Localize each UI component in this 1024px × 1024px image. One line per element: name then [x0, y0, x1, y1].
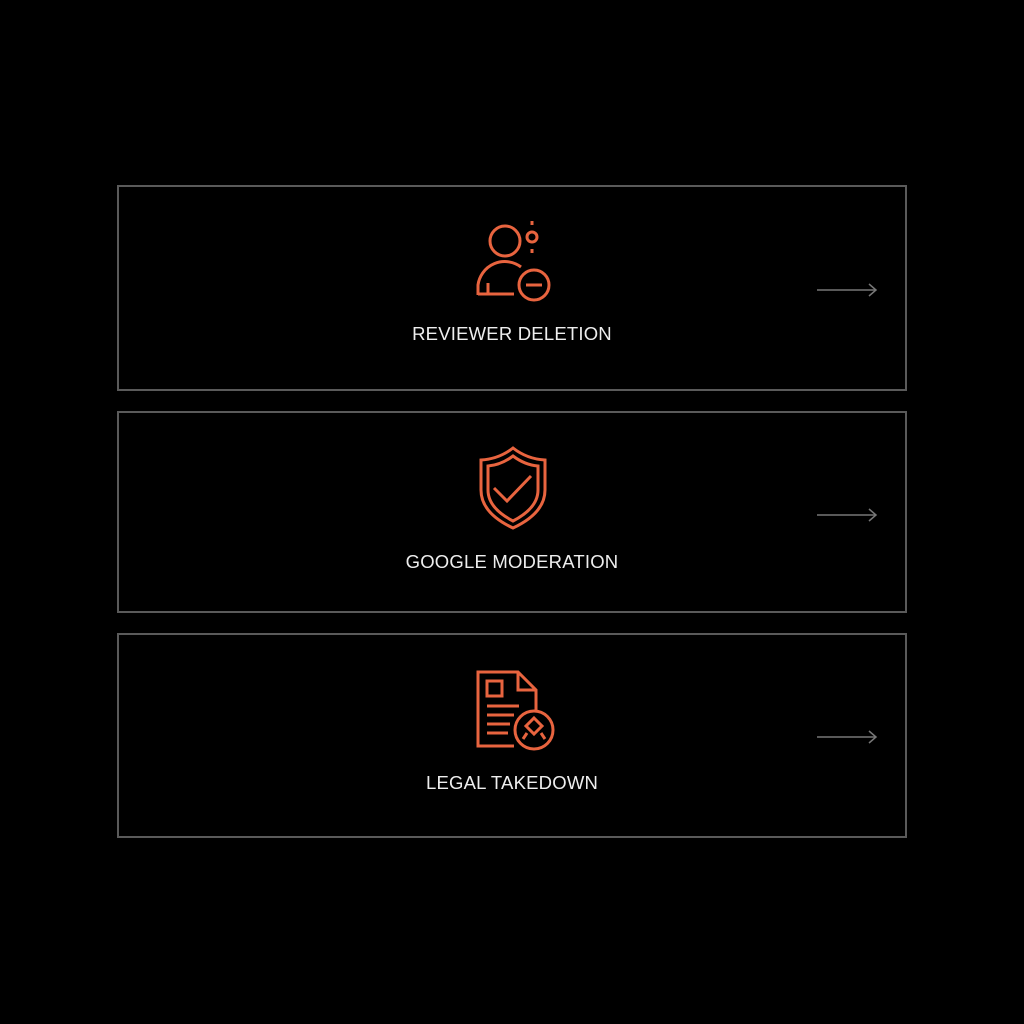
- arrow: [817, 284, 877, 296]
- label: LEGAL TAKEDOWN: [426, 772, 598, 793]
- label: GOOGLE MODERATION: [406, 551, 618, 572]
- arrow: [817, 730, 877, 744]
- icon: document with gavel: [476, 670, 554, 750]
- label: REVIEWER DELETION: [412, 323, 612, 344]
- icon: shield check: [480, 446, 546, 530]
- card: legal takedown: [117, 633, 907, 838]
- arrow: [817, 508, 877, 522]
- icon: user minus: [476, 221, 550, 302]
- card: reviewer deletion: [117, 185, 907, 391]
- card: google moderation: [117, 411, 907, 613]
